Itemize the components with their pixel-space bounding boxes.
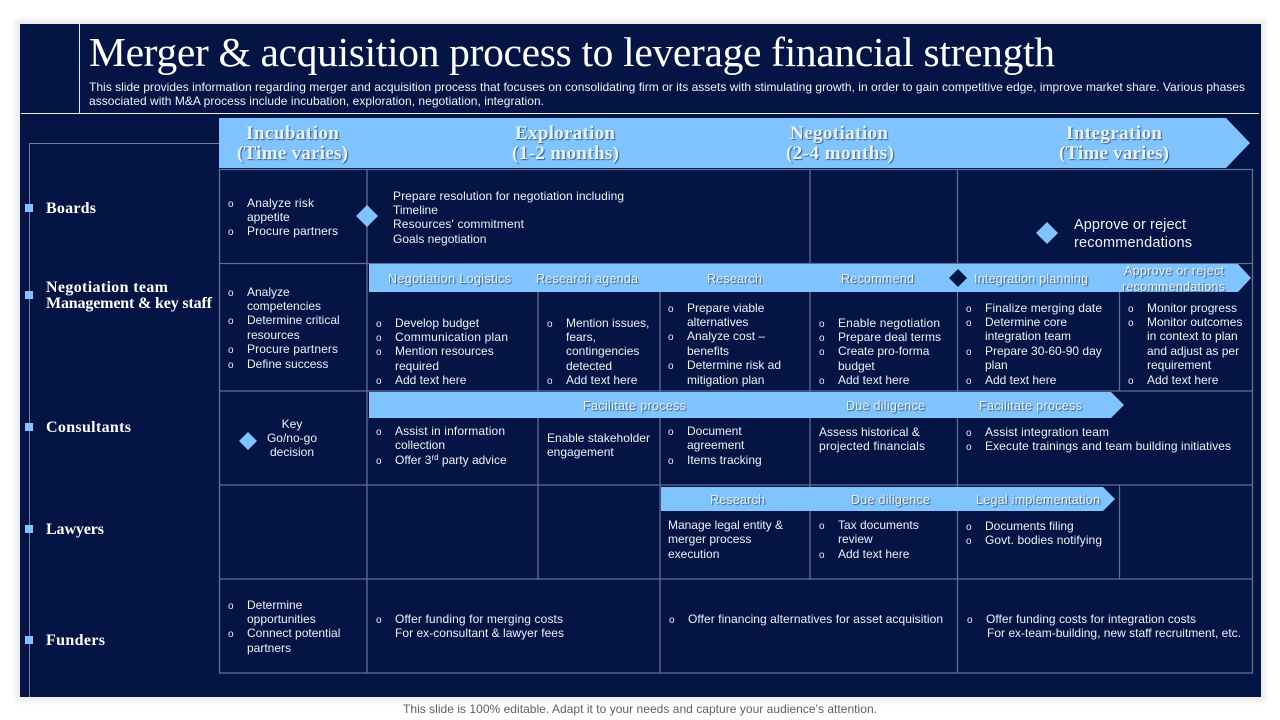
phase: exploration: Exploration [515,123,615,144]
lawyers: tax cell: Add text here [838,547,910,561]
negotiation team: logistics cell: Develop budget [395,316,480,330]
lawyers: legal entity cell: execution [668,547,719,561]
lawyers: legal entity cell: Manage legal entity & [668,518,783,532]
consultants: decision cell: decision [270,445,314,459]
row label: negotiation team [25,279,213,312]
phase: negotiation: Negotiation [790,123,888,144]
negotiation team: incubation cell [228,285,340,371]
funders: exploration cell: For ex-consultant & lawyer fees [395,626,564,640]
table grid lines [220,170,1252,673]
boards: integration callout [1074,217,1192,251]
lawyers: legal entity cell: merger process [668,532,751,546]
funders: incubation cell: opportunities [247,612,316,626]
consultants: stakeholder cell: Enable stakeholder [547,431,650,445]
lawyers: arrow bar [661,487,1115,511]
negotiation team: arrow bar [369,264,1251,294]
footer note: This slide is 100% editable. Adapt it to your needs and capture your audience's attention. [403,702,877,716]
consultants: document cell: o [668,456,674,467]
negotiation team: arrow bar: Research [707,272,762,286]
phase: incubation: Incubation [246,123,339,144]
consultants: stakeholder cell [547,431,650,459]
lawyers: arrow bar: Research [710,493,765,507]
consultants: document cell [668,424,762,467]
lawyers: tax cell: Tax documents [838,518,919,532]
negotiation team: approve cell: o [1128,376,1134,387]
negotiation team: recommend cell: Add text here [838,373,910,387]
boards: exploration cell: Prepare resolution for negotiation including [393,189,624,203]
negotiation team: approve cell: Monitor progress [1147,301,1237,315]
negotiation team: incubation cell: competencies [247,299,321,313]
negotiation team: research cell: o [668,332,674,343]
consultants: document cell: Document [687,424,742,438]
phase: incubation: (Time varies) [237,143,348,164]
negotiation team: agenda cell: fears, [566,330,596,344]
funders: exploration cell: Offer funding for merging costs [395,612,563,626]
boards: incubation cell: o [228,227,234,238]
negotiation team: recommend cell [819,316,941,387]
negotiation team: integration planning cell [966,301,1102,387]
row label: funders: Funders [46,632,105,649]
funders: incubation cell [228,598,340,655]
negotiation team: agenda cell: detected [566,359,612,373]
negotiation team: logistics cell: o [376,347,382,358]
phase arrow header [219,118,1250,168]
negotiation team: agenda cell: Add text here [566,373,638,387]
funders: incubation cell: Determine [247,598,303,612]
negotiation team: logistics cell: Add text here [395,373,467,387]
funders: incubation cell: o [228,629,234,640]
negotiation team: research cell: o [668,304,674,315]
lawyers: filing cell: Documents filing [985,519,1074,533]
row label: boards: Boards [46,200,96,217]
consultants: integration cell [966,425,1231,453]
negotiation team: integration planning cell: Finalize merging date [985,301,1102,315]
funders: exploration cell [376,612,564,640]
boards: exploration cell: Goals negotiation [393,232,486,246]
negotiation team: logistics cell: o [376,333,382,344]
lawyers: filing cell [966,519,1102,547]
negotiation team: approve cell: Add text here [1147,373,1219,387]
subtitle text block: associated with M&A process include incubation, exploration, negotiation, integration. [89,94,544,108]
lawyers: legal entity cell [668,518,783,561]
negotiation team: logistics cell: Mention resources [395,344,494,358]
negotiation team: integration planning cell: Prepare 30-60-90 day [985,344,1102,358]
consultants: information cell: collection [395,438,445,452]
negotiation team: approve cell [1128,301,1242,387]
subtitle text block [89,80,1245,108]
consultants: financials cell [819,425,925,453]
negotiation team: agenda cell: o [547,319,553,330]
phase: negotiation [786,123,894,164]
consultants: information cell: Assist in information [395,424,505,438]
negotiation team: agenda cell [547,316,649,387]
negotiation team: agenda cell: o [547,376,553,387]
negotiation team: recommend cell: Prepare deal terms [838,330,941,344]
negotiation team: research cell [668,301,781,387]
negotiation team: arrow bar: Approve or reject [1124,264,1225,278]
icon: go/no-go diamond [239,432,257,450]
negotiation team: recommend cell: budget [838,359,875,373]
consultants: integration cell: Execute trainings and team building initiatives [985,439,1231,453]
funders: integration cell: For ex-team-building, new staff recruitment, etc. [987,626,1241,640]
consultants: financials cell: projected financials [819,439,925,453]
negotiation team: incubation cell: Define success [247,357,328,371]
consultants: arrow bar: Facilitate process [583,399,686,413]
consultants: decision cell: Key [282,417,302,431]
funders: incubation cell: o [228,601,234,612]
phase: exploration [512,123,619,164]
consultants: financials cell: Assess historical & [819,425,920,439]
negotiation team: incubation cell: o [228,345,234,356]
funders: integration cell: Offer funding costs for integration costs [986,612,1196,626]
negotiation team: logistics cell: o [376,319,382,330]
negotiation team: incubation cell: resources [247,328,300,342]
negotiation team: arrow bar: Negotiation Logistics [388,272,511,286]
boards: exploration cell: Timeline [393,203,438,217]
boards: incubation cell [228,196,338,238]
consultants: arrow bar: Facilitate process [979,399,1082,413]
boards: exploration cell [393,189,624,246]
negotiation team: approve cell: requirement [1147,358,1212,372]
consultants: information cell: Offer 3 [395,453,431,467]
phase: exploration: (1-2 months) [512,143,619,164]
consultants: document cell: o [668,427,674,438]
consultants: information cell: rd [431,453,439,462]
phase: integration: Integration [1066,123,1162,144]
consultants: decision cell: Go/no-go [267,431,317,445]
funders: negotiation cell: o [669,615,675,626]
phase: integration [1059,123,1169,164]
lawyers: arrow bar: Legal implementation [976,493,1100,507]
negotiation team: recommend cell: Enable negotiation [838,316,940,330]
negotiation team: arrow bar: Recommend [841,272,914,286]
consultants: document cell: Items tracking [687,453,762,467]
header rules [21,24,1259,114]
icon: diamond milestone [356,205,378,227]
negotiation team: incubation cell: o [228,316,234,327]
negotiation team: research cell: Determine risk ad [687,358,781,372]
negotiation team: integration planning cell: integration team [985,329,1071,343]
negotiation team: research cell: benefits [687,344,729,358]
consultants: decision cell [267,417,317,459]
consultants: stakeholder cell: engagement [547,445,614,459]
boards: incubation cell: Analyze risk [247,196,315,210]
negotiation team: approve cell: in context to plan [1147,329,1238,343]
negotiation team: recommend cell: o [819,376,825,387]
boards: exploration cell: Resources' commitment [393,217,525,231]
icon: diamond approve [1036,222,1058,244]
negotiation team: research cell: mitigation plan [687,373,764,387]
funders: integration cell: o [967,615,973,626]
consultants: integration cell: o [966,442,972,453]
lawyers: filing cell: o [966,522,972,533]
boards: incubation cell: o [228,199,234,210]
negotiation team: agenda cell: Mention issues, [566,316,649,330]
negotiation team: arrow bar: recommendations [1122,280,1225,294]
lawyers: filing cell: Govt. bodies notifying [985,533,1102,547]
negotiation team: arrow bar: Integration planning [974,272,1088,286]
negotiation team: approve cell: o [1128,318,1134,329]
consultants: information cell [376,424,507,467]
funders: exploration cell: o [376,615,382,626]
negotiation team: research cell: o [668,361,674,372]
negotiation team: recommend cell: Create pro-forma [838,344,930,358]
title: Merger & acquisition process to leverage financial strength [89,29,1055,75]
negotiation team: agenda cell: contingencies [566,344,639,358]
lawyers: tax cell: o [819,521,825,532]
negotiation team: recommend cell: o [819,333,825,344]
negotiation team: incubation cell: o [228,360,234,371]
boards: incubation cell: appetite [247,210,290,224]
row label: lawyers: Lawyers [46,521,104,538]
negotiation team: recommend cell: o [819,347,825,358]
row label: negotiation team: Management & key staff [46,295,213,312]
negotiation team: incubation cell: Procure partners [247,342,338,356]
negotiation team: logistics cell: required [395,359,439,373]
icon: dark diamond [949,269,967,287]
negotiation team: arrow bar: Research agenda [536,272,638,286]
negotiation team: integration planning cell: o [966,347,972,358]
consultants: integration cell: Assist integration team [985,425,1109,439]
negotiation team: recommend cell: o [819,319,825,330]
negotiation team: research cell: alternatives [687,315,748,329]
subtitle text block: This slide provides information regarding merger and acquisition process that focuses on consolidating firm or its assets with stimulating growth, in order to gain competitive edge, improve market share. Various phases [89,80,1245,94]
negotiation team: research cell: Prepare viable [687,301,765,315]
boards: integration callout: recommendations [1074,235,1192,251]
row label: consultants: Consultants [46,419,131,436]
negotiation team: incubation cell: Analyze [247,285,290,299]
lawyers: filing cell: o [966,536,972,547]
lawyers: tax cell: o [819,550,825,561]
negotiation team: integration planning cell: Determine core [985,315,1067,329]
phase: negotiation: (2-4 months) [786,143,894,164]
lawyers: arrow bar: Due diligence [851,493,930,507]
consultants: arrow bar [369,392,1124,418]
negotiation team: integration planning cell: plan [985,358,1008,372]
consultants: document cell: agreement [687,438,745,452]
consultants: integration cell: o [966,428,972,439]
consultants: arrow bar: Due diligence [846,399,925,413]
negotiation team: integration planning cell: o [966,304,972,315]
negotiation team: approve cell: o [1128,304,1134,315]
funders: integration cell [967,612,1241,640]
phase: integration: (Time varies) [1059,143,1169,164]
negotiation team: incubation cell: o [228,288,234,299]
negotiation team: incubation cell: Determine critical [247,313,340,327]
boards: integration callout: Approve or reject [1074,217,1186,233]
consultants: information cell: party advice [439,453,507,467]
consultants: information cell: o [376,456,382,467]
row label: negotiation team: Negotiation team [46,279,169,296]
negotiation team: integration planning cell: Add text here [985,373,1057,387]
negotiation team: logistics cell: o [376,376,382,387]
negotiation team: research cell: Analyze cost – [687,329,765,343]
negotiation team: logistics cell [376,316,508,387]
lawyers: tax cell [819,518,919,561]
funders: incubation cell: partners [247,641,291,655]
funders: negotiation cell: Offer financing alternatives for asset acquisition [688,612,943,626]
negotiation team: integration planning cell: o [966,376,972,387]
lawyers: tax cell: review [838,532,873,546]
funders: incubation cell: Connect potential [247,626,340,640]
phase: incubation [237,123,348,164]
negotiation team: approve cell: and adjust as per [1147,344,1239,358]
negotiation team: integration planning cell: o [966,318,972,329]
negotiation team: approve cell: Monitor outcomes [1147,315,1242,329]
boards: incubation cell: Procure partners [247,224,338,238]
negotiation team: logistics cell: Communication plan [395,330,508,344]
consultants: information cell: o [376,427,382,438]
timeline axis [30,144,219,697]
